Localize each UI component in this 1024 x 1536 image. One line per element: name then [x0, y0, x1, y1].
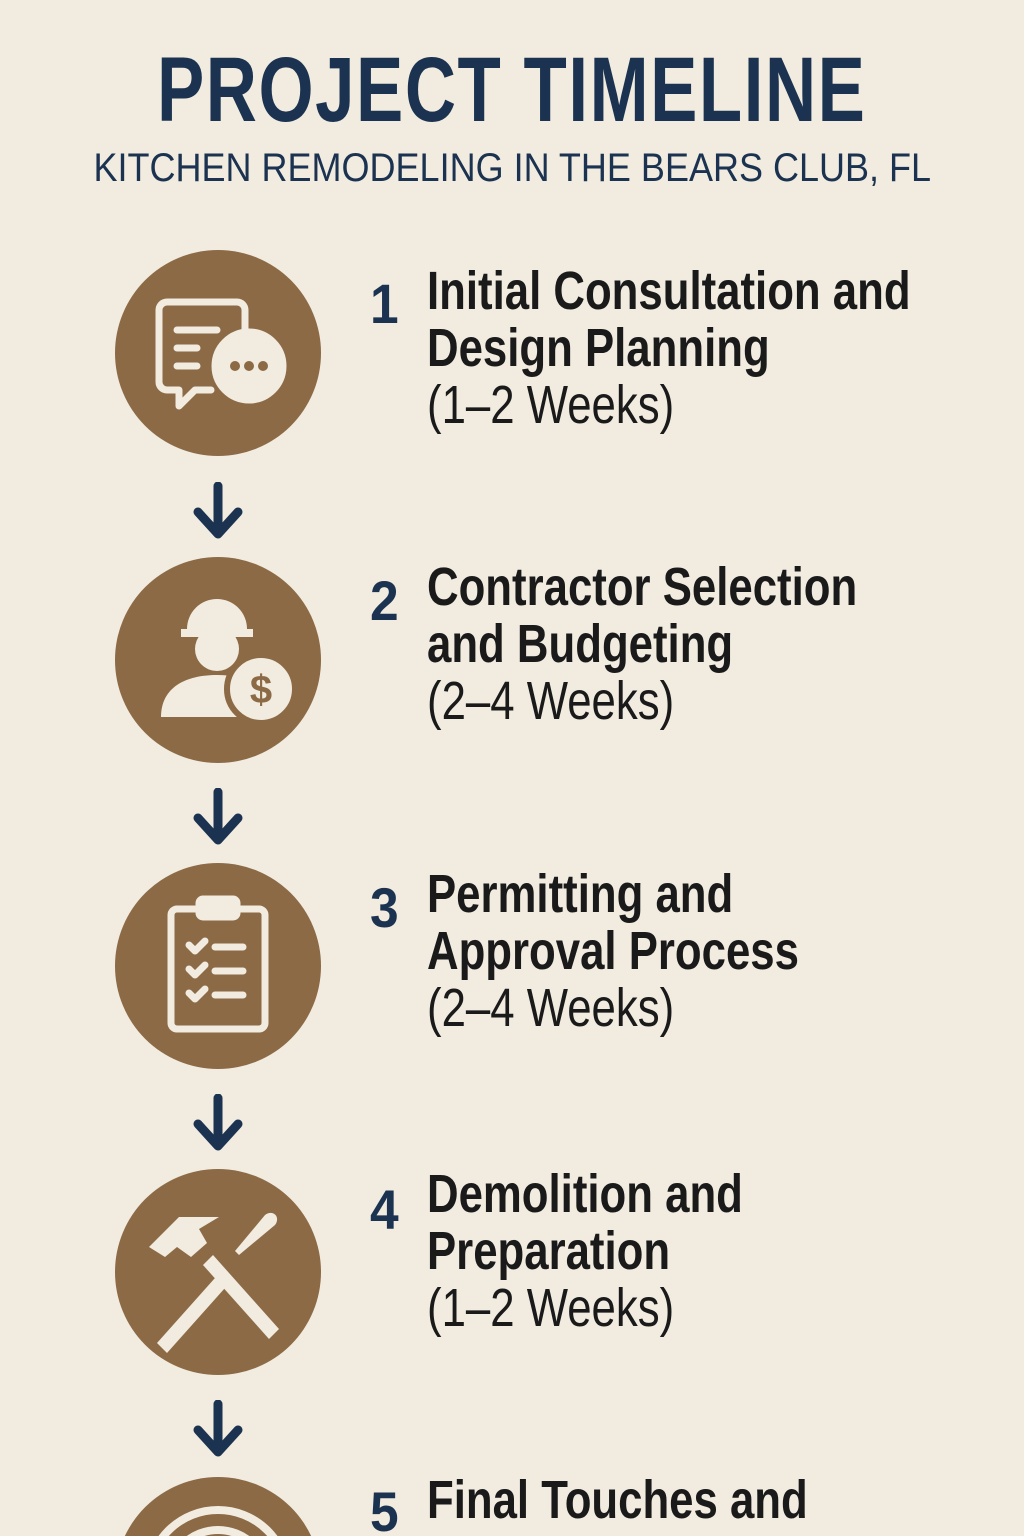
- icon: contractor: [115, 557, 321, 763]
- step 3 text: Permitting and: [427, 864, 733, 924]
- subtitle: KITCHEN REMODELING IN THE BEARS CLUB, FL: [93, 146, 931, 190]
- step 3 number: 3: [370, 876, 399, 939]
- title: PROJECT TIMELINE: [157, 39, 867, 141]
- step 1 text: Design Planning: [427, 318, 770, 378]
- step 1 text: Initial Consultation and: [427, 261, 911, 321]
- step 4 text: Demolition and: [427, 1164, 743, 1224]
- arrow 3: [194, 1094, 242, 1150]
- step 4 text: [427, 1164, 743, 1338]
- step 3 text: (2–4 Weeks): [427, 978, 674, 1038]
- step 1 text: [427, 261, 911, 435]
- step 4 text: (1–2 Weeks): [427, 1278, 674, 1338]
- icon: clipboard: [115, 863, 321, 1069]
- step 4 number: 4: [370, 1178, 399, 1241]
- arrow 4: [194, 1400, 242, 1456]
- step 5 text: Final Touches and: [427, 1470, 808, 1530]
- icon: tools: [115, 1169, 321, 1375]
- icon: final touches: [124, 1477, 312, 1536]
- step 2 text: [427, 557, 857, 731]
- step 3 text: Approval Process: [427, 921, 799, 981]
- step 4 text: Preparation: [427, 1221, 670, 1281]
- step 1 text: (1–2 Weeks): [427, 375, 674, 435]
- step 2 text: Contractor Selection: [427, 557, 857, 617]
- step 1 number: 1: [370, 272, 399, 335]
- icon: contractor: $: [250, 668, 272, 712]
- icon: consultation: [115, 250, 321, 456]
- step 3 text: [427, 864, 799, 1038]
- step 2 number: 2: [370, 569, 399, 632]
- step 2 text: and Budgeting: [427, 614, 733, 674]
- step 2 text: (2–4 Weeks): [427, 671, 674, 731]
- arrow 1: [194, 482, 242, 538]
- arrow 2: [194, 788, 242, 844]
